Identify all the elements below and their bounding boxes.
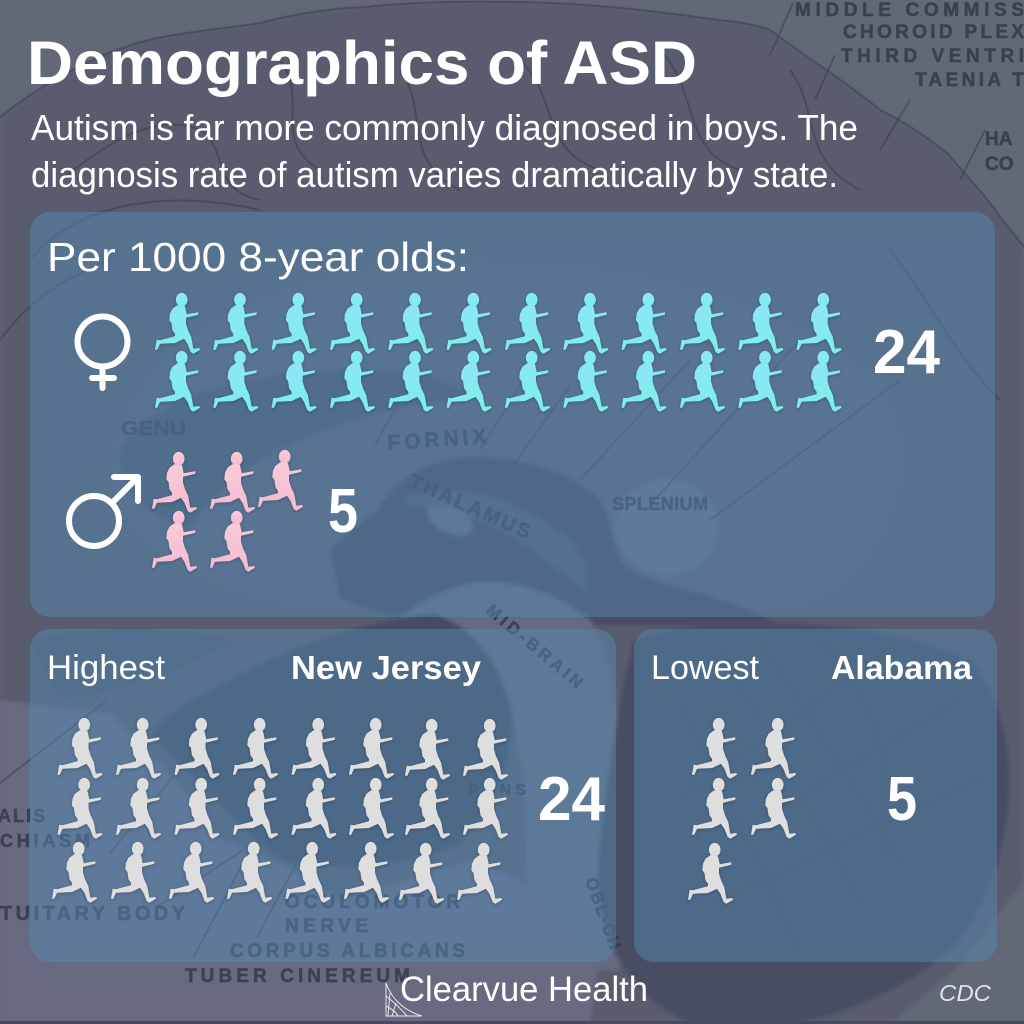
background: brain illustration: GENU <box>121 418 186 440</box>
state name: Alabama: Alabama <box>831 649 973 686</box>
pictogram: 24 grey runners <box>52 718 508 904</box>
number: 24: 24 <box>538 765 605 834</box>
background: brain illustration: TUBER CINEREUM <box>185 966 410 987</box>
background: brain illustration: FORNIX <box>387 425 487 455</box>
background: brain illustration: SPLENIUM <box>612 494 708 514</box>
footer logo <box>386 970 648 1016</box>
number: 24: 24 <box>873 318 940 387</box>
background: brain illustration: MID-BRAIN <box>482 601 587 692</box>
icon: logo web triangle <box>386 983 422 1016</box>
panel: highest state <box>30 629 616 962</box>
background: brain illustration: NERVE <box>285 916 368 937</box>
subtitle text: Autism is far more commonly diagnosed in boys. The <box>31 107 858 148</box>
icon: female symbol <box>78 316 128 388</box>
background: brain illustration: MIDDLE COMMISS <box>795 0 1024 21</box>
pictogram: 24 cyan runners <box>155 293 842 412</box>
background: brain illustration: THIRD VENTRI <box>841 46 1024 67</box>
background: brain illustration: THALAMUS <box>406 470 534 543</box>
panel: lowest state <box>634 629 997 962</box>
background: brain illustration: CHIASM <box>0 831 90 851</box>
background: brain illustration: OCULOMOTOR <box>285 892 460 913</box>
number: 5: 5 <box>328 477 358 546</box>
subtitle text <box>31 107 858 195</box>
background: brain illustration: CHOROID PLEX <box>843 22 1024 43</box>
background: brain illustration: TAENIA T <box>915 70 1024 91</box>
source credit: CDC <box>939 980 991 1006</box>
panel: per 1000 by sex <box>30 212 995 617</box>
number: 5: 5 <box>887 765 917 834</box>
background: brain illustration: CORPUS ALBICANS <box>230 941 465 962</box>
pictogram: 5 grey runners <box>688 718 796 904</box>
background: brain illustration: TUITARY BODY <box>0 903 186 925</box>
state name: New Jersey: New Jersey <box>291 649 482 686</box>
label: highest: Highest <box>47 649 166 687</box>
subtitle text: diagnosis rate of autism varies dramatically by state. <box>31 154 838 195</box>
icon: male symbol <box>69 477 138 546</box>
pictogram: 5 pink runners <box>152 450 303 572</box>
background: brain illustration: HA <box>985 129 1013 150</box>
background: brain illustration: PONS <box>468 782 526 799</box>
title: Demographics of ASD <box>27 29 697 97</box>
background: brain illustration: OBL-CH <box>581 875 625 952</box>
label: lowest: Lowest <box>651 649 760 687</box>
brand name: Clearvue Health <box>400 970 648 1009</box>
background: brain illustration: CO <box>985 154 1014 175</box>
panel heading: Per 1000 8-year olds: <box>47 234 469 280</box>
